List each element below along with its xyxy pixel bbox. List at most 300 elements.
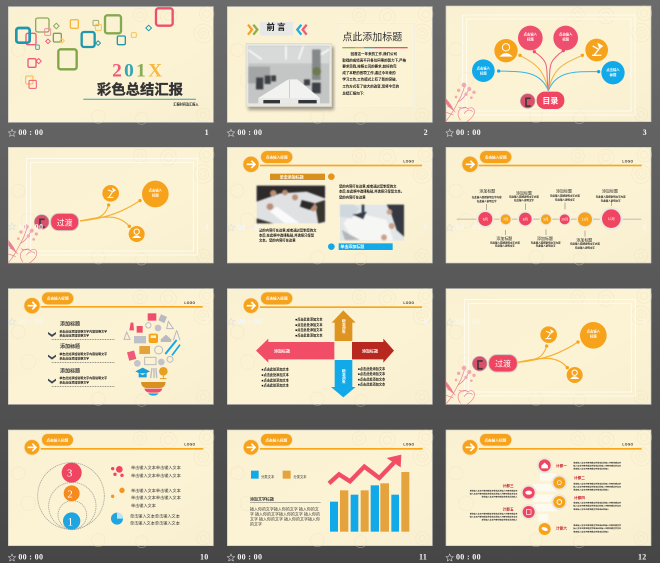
item 4 text: 单击输入文本内容说明文字单击此处输入内容说明文字 <box>573 501 621 505</box>
slide 11: bar chart <box>227 430 433 562</box>
node: pink left: 标题 <box>527 36 534 41</box>
body text: 文字 插入你的文字 插入你的文字插入你 <box>250 515 320 521</box>
footer: timing and number <box>8 128 209 137</box>
slide 8: four arrows <box>227 289 433 406</box>
footer: timing and number: 12 <box>638 553 647 562</box>
labels above axis: 添加标题 <box>479 188 495 194</box>
slide background <box>446 147 652 265</box>
item 2 text: 单击输入文本内容说明文字单击此处输入 <box>573 488 609 492</box>
header bar: LOGO <box>184 443 196 447</box>
item 3 text: 单击输入文本内容说明文字单击此处输入 <box>482 495 517 499</box>
orange marker <box>328 173 335 180</box>
milestone: August: 8月 <box>523 217 528 221</box>
slide 12: staggered list <box>446 430 652 562</box>
circle 2 <box>64 485 80 501</box>
text list bottom right: ■点击此处添加文本 <box>358 366 386 371</box>
node: pink right: 标题 <box>562 36 570 41</box>
header bar: LOGO <box>403 301 415 305</box>
header bar: 点击输入标题 <box>46 437 69 442</box>
left chevrons <box>248 25 257 35</box>
left paragraph: 您的内容打在这里,或者通过复制您的文 <box>259 227 317 232</box>
milestone: December <box>600 207 623 230</box>
meeting photo <box>257 186 325 223</box>
milestone: September: 9月 <box>543 218 549 222</box>
heading tag: preface <box>260 22 293 36</box>
item 5 text: 计都五 <box>503 506 514 511</box>
footer: timing and number: 8 <box>424 317 428 326</box>
item 6 text: 输入文本内容说明文字单击此处输入内容说明文字文本 <box>573 526 621 530</box>
footer: timing and number <box>446 128 647 137</box>
item 5 text: 单击输入文本内容说明文字单击此处输入 <box>482 518 517 522</box>
item 2 text: 计都二 <box>574 475 585 480</box>
title underline <box>83 99 196 100</box>
slide 5: photos and text <box>227 147 433 265</box>
body text: 的文字 <box>250 520 262 526</box>
legend: 分类文本 <box>261 474 275 479</box>
item 6 text: 单击输入文本内容说明文字单击此处输入 <box>573 529 609 533</box>
list item 1: 添加标题 <box>60 320 80 327</box>
slide 2: preface <box>227 7 433 137</box>
blue subtitle bar <box>339 243 393 250</box>
legend: 分类文本 <box>293 474 307 479</box>
connector end dots <box>107 199 142 228</box>
text list bottom right: ■点击此处添加文本 <box>358 371 386 376</box>
lightbulb of study icons <box>124 313 180 396</box>
footer: timing and number <box>227 317 428 326</box>
text list bottom right <box>358 366 386 387</box>
footer: timing and number <box>8 317 209 326</box>
header bar <box>243 151 422 172</box>
arrow right: 添加标题 <box>362 347 378 353</box>
labels above axis <box>472 188 626 203</box>
circle 1 <box>63 512 80 530</box>
slide background <box>446 289 652 406</box>
transition pill: 过渡 <box>495 359 511 369</box>
footer: timing and number: 00 : 00 <box>237 553 262 562</box>
header bar: 点击输入标题 <box>266 296 288 301</box>
preface body: 工作方式有了较大的改变,现将今年的 <box>342 83 400 88</box>
node: lamp icon <box>102 185 119 202</box>
list item 2 <box>48 343 114 362</box>
item 4 text: 输入文本内容说明文字单击此处输入内容说明文字文本 <box>573 504 621 508</box>
preface body: 回首这一年来的工作,我们公司 <box>351 51 397 56</box>
book icon badge <box>34 215 49 229</box>
contents pill <box>537 92 564 109</box>
main title: 彩色总结汇报 <box>97 79 183 100</box>
text list top: ■点击此处添加文本 <box>295 317 323 322</box>
blue pie icon <box>111 513 123 525</box>
panel title: 点此添加标题 <box>342 30 402 43</box>
node: blue right: 点击输入 <box>606 67 620 72</box>
flower decoration <box>446 366 476 405</box>
node: title circle <box>580 322 607 349</box>
right paragraph: 您的内容打在这里 <box>339 194 366 199</box>
text block 2: 单击输入文本单击输入文本 <box>131 487 181 493</box>
text panel <box>336 23 415 107</box>
arrow left: 添加标题 <box>274 347 290 353</box>
item 1 text: 单击输入文本内容说明文字单击此处输入 <box>573 466 609 470</box>
milestone: September <box>540 213 552 226</box>
labels above axis: 在此输入说明文字 <box>601 198 621 202</box>
list item 2: 单击此处添加说明文字 <box>59 355 89 360</box>
slide background <box>227 7 433 124</box>
right paragraph <box>339 184 404 199</box>
item 6 text: 计都六 <box>556 526 567 531</box>
bars <box>330 472 409 532</box>
header bar <box>24 434 203 455</box>
milestone: June: 6月 <box>483 217 488 221</box>
node: lamp icon <box>540 326 557 343</box>
body text: 字 插入你的文字插入你的文字 插入你的 <box>250 510 320 516</box>
text block 1 <box>131 464 181 478</box>
arrow down: 添加标题 <box>341 369 346 384</box>
text block 3: 单击输入文本单击输入文本 <box>130 520 180 526</box>
connector curves <box>499 51 599 91</box>
colourful rounded squares <box>16 8 173 88</box>
slide background <box>227 289 433 406</box>
node: title circle: 点击输入 <box>587 329 601 334</box>
orange dots icon <box>111 488 125 498</box>
labels below axis: 添加标题 <box>576 236 592 242</box>
legend <box>251 471 307 479</box>
milestone: August <box>517 211 533 227</box>
circle 2: 2 <box>67 489 73 500</box>
text block 3: 单击输入文本单击输入文本 <box>130 512 180 518</box>
book icon badge <box>520 94 535 108</box>
labels below axis: 在此输入简短说明文字内容 <box>490 240 520 244</box>
slide background <box>8 289 214 406</box>
item 4 text: 计都四 <box>574 495 585 500</box>
milestone: December: 12月 <box>608 217 615 221</box>
item 3 text: 输入文本内容说明文字单击此处输入内容说明文字文本 <box>470 491 517 495</box>
list item 3: 单击此处添加说明文字 <box>59 379 89 384</box>
dashed nested rings <box>38 463 104 530</box>
slide background <box>446 430 652 548</box>
preface body: 成了本职的各项工作,通过今年来的 <box>342 70 396 75</box>
labels below axis: 添加标题 <box>496 235 512 241</box>
list item 1: 单击此处添加说明文字内容说明文字 <box>59 328 107 333</box>
text list bottom left: ■点击此处添加文本 <box>262 372 290 377</box>
footer: timing and number: 11 <box>419 553 427 562</box>
slide 10: nested circles <box>8 430 214 562</box>
node: pink right <box>553 26 578 50</box>
text list bottom right: ■点击此处添加文本 <box>358 382 386 387</box>
footer: timing and number <box>446 318 647 327</box>
right paragraph: 本后,在此框中选择粘贴,并选择只保留文本。 <box>339 189 404 194</box>
list item 2: 单击此处添加说明文字内容说明文字 <box>59 351 107 356</box>
colour rule <box>342 47 408 48</box>
preface body: 总结汇报如下: <box>342 91 364 96</box>
header bar: LOGO <box>622 443 634 447</box>
item 5 circle <box>521 504 537 520</box>
text heading: 添加文字标题 <box>250 495 274 501</box>
connector end dots <box>545 340 580 369</box>
labels below axis: 在此输入简短说明文字内容 <box>570 242 600 246</box>
text list bottom left: ■点击此处添加文本 <box>262 378 290 383</box>
item 1 circle <box>537 457 553 473</box>
header bar <box>462 434 642 455</box>
circle 1: 1 <box>67 516 73 528</box>
arrow down <box>331 360 356 397</box>
footer: timing and number <box>8 223 209 232</box>
item 5 text: 单击输入文本内容说明文字单击此处输入内容说明文字 <box>470 511 517 515</box>
arrow left <box>256 339 334 363</box>
connector end dots <box>497 49 600 73</box>
labels above axis: 在此输入简短说明文字内容 <box>550 194 580 198</box>
item 4 text <box>573 495 621 511</box>
item 3 text <box>470 483 517 499</box>
preface body: 取得的成绩离不开各位同事的努力下,严格 <box>342 57 407 62</box>
preface body: 要求自我,按照公司的要求,较好的完 <box>342 64 397 69</box>
footer: timing and number: 00 : 00 <box>18 317 43 326</box>
labels below axis: 在此输入说明文字 <box>536 244 556 248</box>
footer: timing and number: 9 <box>643 318 647 327</box>
node: pink left: 点击输入 <box>524 31 538 36</box>
office photo <box>246 43 334 110</box>
milestone: November: 11月 <box>582 218 588 222</box>
text block 2: 单击输入文本 <box>131 502 156 508</box>
footer: timing and number: 00 : 00 <box>237 223 262 232</box>
footer: timing and number: 00 : 00 <box>456 128 481 137</box>
pink dots icon <box>111 466 124 477</box>
slide background <box>8 7 214 124</box>
double white frame <box>463 15 635 115</box>
footer: timing and number: 1 <box>205 128 209 137</box>
milestone: October: 10月 <box>561 218 568 222</box>
node: blue left <box>472 59 495 82</box>
node: blue right <box>601 61 625 84</box>
preface body: 学习工作,工作模式上有了新的突破, <box>342 77 397 82</box>
connector curves <box>518 342 578 368</box>
milestone: November <box>577 211 593 228</box>
list item 3 <box>48 367 114 386</box>
footer: timing and number <box>227 128 428 137</box>
footer: timing and number <box>446 223 647 232</box>
text list top: ■点击此处添加文本 <box>295 332 323 337</box>
footer: timing and number: 6 <box>643 223 647 232</box>
item 6 circle <box>539 523 551 535</box>
left paragraph: 文本。您的内容打在这里 <box>259 237 296 242</box>
transition pill <box>489 355 517 372</box>
item 2 text: 输入文本内容说明文字单击此处输入内容说明文字文本 <box>573 485 621 489</box>
orange subtitle bar <box>270 173 325 180</box>
milestone: June <box>476 210 494 228</box>
slide background <box>8 147 214 265</box>
footer: timing and number <box>446 553 647 562</box>
header bar: 点击输入标题 <box>47 296 69 301</box>
text list bottom right: ■点击此处添加文本 <box>358 377 386 382</box>
header bar: LOGO <box>622 160 634 164</box>
reporter note: 汇报时间及汇报人 <box>173 102 199 107</box>
white connecting bands <box>533 473 557 521</box>
item 3 text: 计都三 <box>503 483 514 488</box>
text list top: ■点击此处添加文本 <box>295 322 323 327</box>
footer: timing and number: 00 : 00 <box>456 223 481 232</box>
node: orange lamp icon <box>585 39 608 61</box>
slide background <box>8 430 214 548</box>
labels above axis: 在此输入简短说明文字内容 <box>472 195 502 199</box>
list item 2: 添加标题 <box>60 343 80 350</box>
header bar: 点击输入标题 <box>265 437 288 442</box>
header bar: LOGO <box>184 301 196 305</box>
footer: timing and number <box>227 223 428 232</box>
left paragraph <box>259 227 317 242</box>
node: pink right: 点击输入 <box>559 31 573 36</box>
node: title circle: 标题 <box>590 334 597 339</box>
footer: timing and number <box>227 553 427 562</box>
body text: 插入你的文字插入你的文字 插入你的文 <box>250 506 319 512</box>
rising trend arrow <box>329 455 401 483</box>
item 5 text <box>470 506 517 522</box>
labels above axis: 添加标题 <box>556 188 572 194</box>
arrow up: 添加标题 <box>341 319 346 334</box>
labels below axis: 在此输入简短说明文字内容 <box>531 240 561 244</box>
slide 6: timeline <box>446 147 652 265</box>
labels above axis: 在此输入说明文字 <box>477 199 497 203</box>
footer: timing and number: 4 <box>205 223 209 232</box>
node: title circle: 点击输入 <box>149 187 163 192</box>
book icon badge <box>472 356 487 371</box>
footer: timing and number: 00 : 00 <box>237 317 262 326</box>
item 5 text: 输入文本内容说明文字单击此处输入内容说明文字文本 <box>470 514 517 518</box>
milestone: July <box>499 213 512 226</box>
footer: timing and number: 5 <box>424 223 428 232</box>
text list top <box>295 317 323 337</box>
item 2 circle <box>551 475 567 491</box>
labels above axis: 在此输入简短说明文字内容 <box>596 194 626 198</box>
labels above axis: 添加标题 <box>516 189 532 195</box>
item 3 text: 单击输入文本内容说明文字单击此处输入内容说明文字 <box>470 488 517 492</box>
footer: timing and number: 00 : 00 <box>456 553 481 562</box>
year title: 201X <box>112 60 164 81</box>
body text <box>250 506 320 526</box>
left paragraph: 本后,在此框中选择粘贴,并选择只保留 <box>259 232 315 237</box>
node: blue left: 标题 <box>480 70 487 75</box>
stem lines <box>487 202 611 237</box>
footer: timing and number: 00 : 00 <box>18 223 43 232</box>
node: blue left: 点击输入 <box>477 65 491 70</box>
flower decoration <box>8 224 38 263</box>
item 3 circle <box>521 485 537 501</box>
heading rule <box>250 501 321 504</box>
labels above axis: 在此输入说明文字 <box>555 198 575 202</box>
text block 2: 单击输入文本单击输入文本 <box>131 494 181 500</box>
double white frame <box>465 299 635 396</box>
item 2 text: 单击输入文本内容说明文字单击此处输入内容说明文字 <box>573 482 621 486</box>
header bar <box>24 292 203 314</box>
footer: timing and number: 3 <box>643 128 647 137</box>
labels below axis: 添加标题 <box>537 235 553 241</box>
milestone: July: 7月 <box>503 218 508 222</box>
right chevrons <box>297 25 307 35</box>
contents pill: 目录 <box>542 96 558 105</box>
slide 7: list and lightbulb <box>8 289 214 406</box>
text list bottom left: ■点击此处添加文本 <box>262 367 290 372</box>
circle 3 <box>62 463 82 483</box>
footer: timing and number: 7 <box>205 317 209 326</box>
heading tag: preface: 前 言 <box>267 22 285 32</box>
arrow right <box>352 339 394 363</box>
orange subtitle bar: 单击添加标题 <box>280 173 304 179</box>
footer: timing and number: 00 : 00 <box>18 553 43 562</box>
list item 3: 添加标题 <box>60 367 80 374</box>
footer: timing and number: 00 : 00 <box>237 128 262 137</box>
labels below axis: 在此输入说明文字 <box>495 244 515 248</box>
labels above axis: 添加标题 <box>602 188 618 194</box>
labels above axis: 在此输入简短说明文字内容 <box>509 195 539 199</box>
node: person icon <box>129 226 145 242</box>
text block 1: 单击输入文本单击输入文本 <box>131 472 181 478</box>
node: blue right: 标题 <box>610 72 617 77</box>
slide 3: contents mind map <box>446 6 652 137</box>
item 2 text <box>573 475 621 492</box>
slide background <box>227 147 433 265</box>
text block 3 <box>130 512 180 526</box>
text list bottom left <box>262 367 290 388</box>
documents photo <box>340 205 404 241</box>
header bar: 点击输入标题 <box>484 437 507 442</box>
node: title circle: 标题 <box>152 192 159 197</box>
header bar: LOGO <box>403 160 415 164</box>
node: pink left <box>518 26 543 50</box>
arrow up <box>332 310 356 341</box>
header bar: 点击输入标题 <box>485 154 507 159</box>
slide 4: transition <box>8 147 214 265</box>
item 1 text: 计都一 <box>556 463 567 468</box>
right paragraph: 您的内容打在这里,或者通过复制您的文 <box>339 184 397 189</box>
labels below axis <box>490 235 600 249</box>
item 6 text: 单击输入文本内容说明文字单击此处输入内容说明文字 <box>573 523 621 527</box>
footer: timing and number: 00 : 00 <box>18 128 43 137</box>
header bar <box>462 151 642 172</box>
list item 3: 单击此处添加说明文字内容说明文字 <box>59 375 107 380</box>
footer: timing and number: 2 <box>424 128 428 137</box>
item 1 text <box>556 460 621 470</box>
item 4 text: 单击输入文本内容说明文字单击此处输入 <box>573 507 609 511</box>
text list top: ■点击此处添加文本 <box>295 327 323 332</box>
labels below axis: 在此输入说明文字 <box>575 245 595 249</box>
item 6 text <box>556 523 621 533</box>
blue marker <box>328 243 335 250</box>
circle 3: 3 <box>67 469 72 480</box>
footer: timing and number: 00 : 00 <box>456 318 481 327</box>
footer: timing and number: 10 <box>200 553 209 562</box>
preface body <box>342 51 407 96</box>
list item 1: 单击此处添加说明文字 <box>59 333 89 338</box>
slide background <box>227 430 433 548</box>
connector curves <box>80 201 140 226</box>
header bar <box>243 434 423 455</box>
text block 2 <box>131 487 181 508</box>
footer: timing and number <box>8 553 209 562</box>
node: orange person icon <box>494 39 518 62</box>
flower decoration <box>446 83 476 122</box>
item 1 text: 输入文本内容说明文字单击此处输入内容说明文字文本 <box>573 463 621 467</box>
double white frame <box>27 158 197 255</box>
node: person icon <box>567 367 583 383</box>
milestone: October <box>558 213 571 226</box>
item 1 text: 单击输入文本内容说明文字单击此处输入内容说明文字 <box>573 460 621 464</box>
text list bottom left: ■点击此处添加文本 <box>262 383 290 388</box>
list item 1 <box>48 320 114 339</box>
header bar: 点击输入标题 <box>266 154 288 159</box>
labels above axis: 在此输入说明文字 <box>514 198 534 202</box>
timeline axis <box>457 219 641 220</box>
slide 9: transition <box>446 289 652 406</box>
transition pill <box>51 213 79 231</box>
blue subtitle bar: 单击添加标题 <box>340 243 364 249</box>
transition pill: 过渡 <box>57 217 73 227</box>
